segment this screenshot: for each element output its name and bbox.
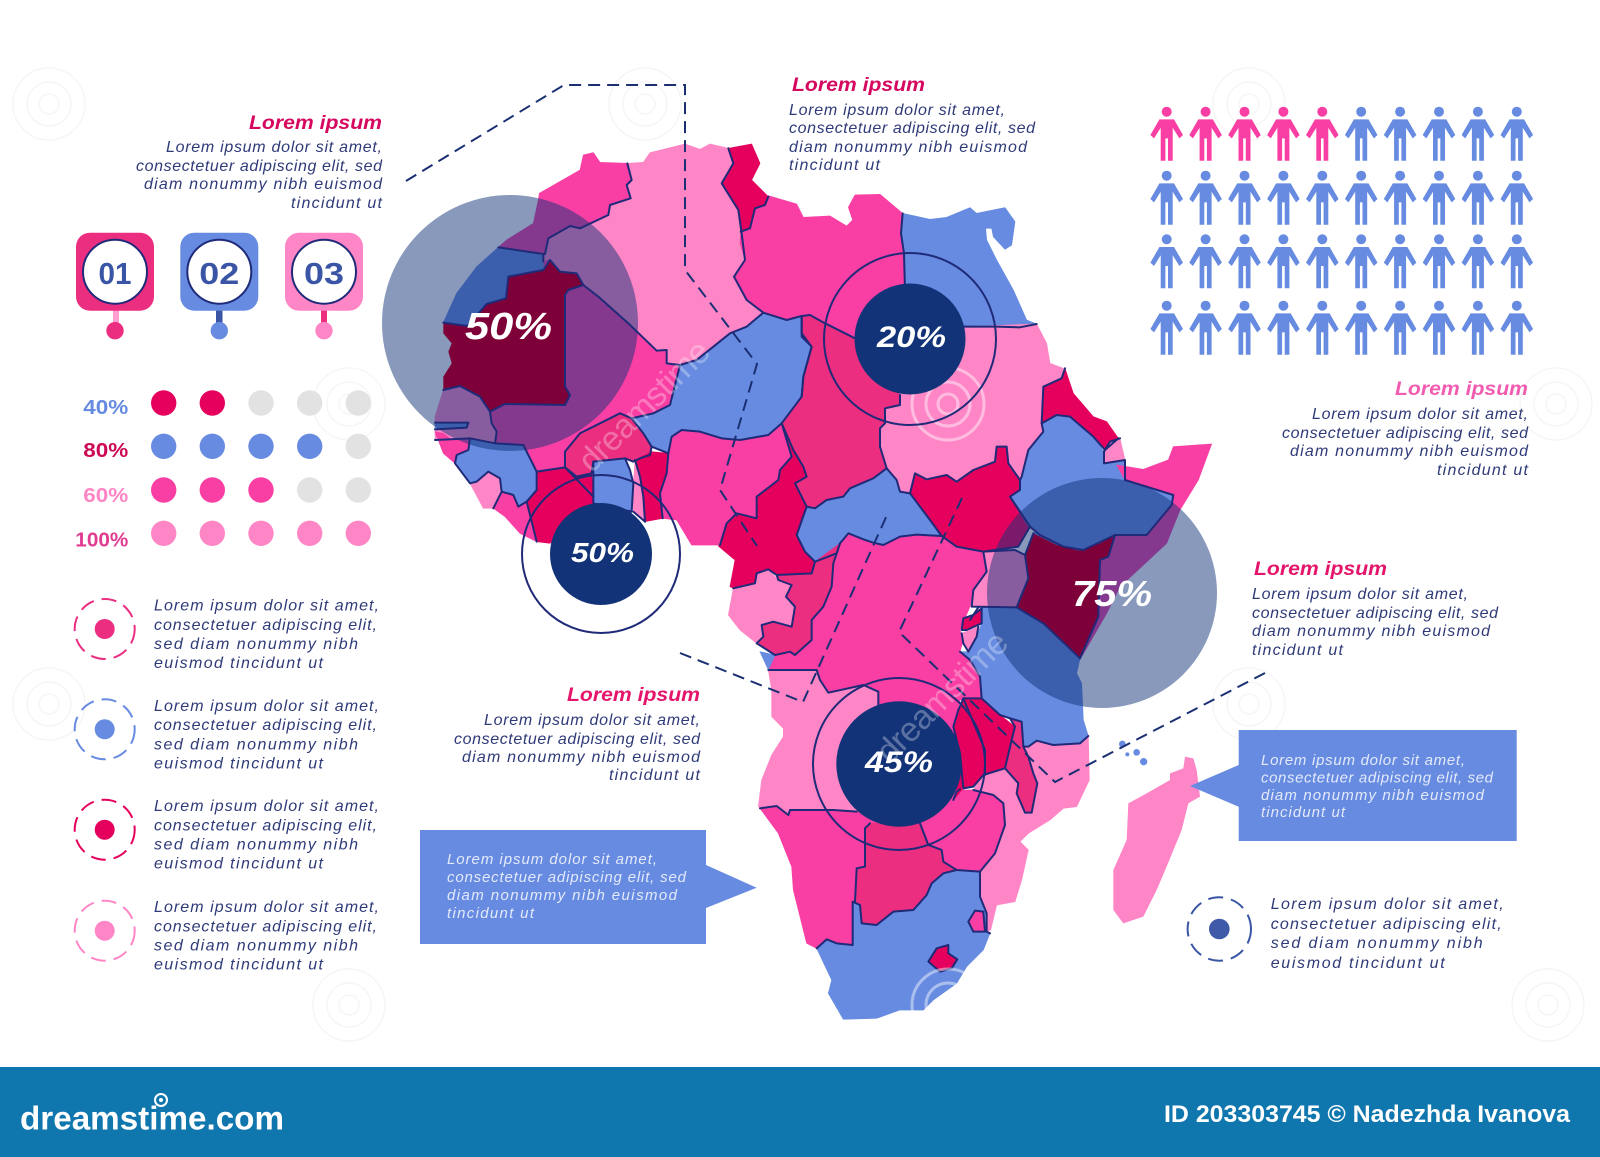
legend item: pink: Lorem ipsum dolor sit amet,: [154, 899, 379, 916]
text block: mid right: tincidunt ut: [1252, 642, 1344, 659]
badge 01: 01: [98, 256, 132, 291]
legend item: navy, bottom right: sed diam nonummy nibh: [1271, 935, 1483, 952]
text block: top left: tincidunt ut: [291, 195, 383, 212]
legend item: navy, bottom right: consectetuer adipiscing elit,: [1271, 916, 1502, 933]
legend item: blue: [75, 698, 379, 772]
text block: top centre: consectetuer adipiscing elit, sed: [789, 120, 1036, 137]
legend item: crimson: Lorem ipsum dolor sit amet,: [154, 798, 379, 815]
callout: right: [1190, 730, 1517, 841]
legend item: crimson: sed diam nonummy nibh: [154, 836, 358, 854]
legend item: navy, bottom right: Lorem ipsum dolor sit amet,: [1271, 896, 1504, 913]
stat ring: 20%: [824, 253, 996, 425]
legend item: navy, bottom right: euismod tincidunt ut: [1271, 955, 1445, 972]
text block: mid right: consectetuer adipiscing elit, sed: [1252, 605, 1499, 622]
text block: top left: Lorem ipsum dolor sit amet,: [166, 139, 382, 156]
dot rating: 40%: 40%: [83, 397, 129, 419]
callout: right: diam nonummy nibh euismod: [1261, 787, 1485, 804]
legend item: blue: Lorem ipsum dolor sit amet,: [154, 698, 379, 715]
legend item: pink: [75, 899, 379, 974]
legend item: pink: consectetuer adipiscing elit,: [154, 918, 377, 936]
watermark spirals on map: [912, 368, 984, 1041]
footer bar: [0, 1067, 1600, 1157]
map: Africa country fills, south: [728, 487, 1115, 1019]
callout: right: tincidunt ut: [1261, 804, 1346, 821]
dot rating: 60%: 60%: [83, 485, 129, 507]
stat ring: 20%: 20%: [876, 321, 946, 354]
text block: top left: [136, 113, 383, 212]
legend item: pink: sed diam nonummy nibh: [154, 938, 358, 954]
legend item: navy, bottom right: [1188, 896, 1504, 972]
text block: right: Lorem ipsum: [1395, 379, 1528, 400]
overlay circle: east 75%: [987, 478, 1217, 708]
map borders: west: [435, 148, 812, 545]
overlay circle: west 50%: [382, 195, 638, 451]
text block: right: Lorem ipsum dolor sit amet,: [1312, 406, 1528, 423]
text block: centre left: diam nonummy nibh euismod: [462, 749, 701, 766]
map: Africa country fills, west: [435, 144, 812, 560]
badge 02: 02: [199, 256, 239, 291]
watermark text: west: dreamstime: [571, 333, 718, 480]
text block: top centre: diam nonummy nibh euismod: [789, 139, 1028, 156]
text block: right: [1282, 379, 1529, 479]
dashed leader line: south-east region: [899, 498, 1265, 782]
callout: lower left: diam nonummy nibh euismod: [447, 887, 678, 904]
legend item: blue: consectetuer adipiscing elit,: [154, 717, 377, 734]
footer logo: dreamstime.com: [20, 1100, 284, 1136]
dot rating: 40%: [83, 390, 371, 419]
highlighted country: Kenya: [1017, 533, 1115, 658]
text block: right: consectetuer adipiscing elit, sed: [1282, 425, 1529, 442]
dot rating: 80%: 80%: [83, 440, 129, 462]
badge 03: [285, 233, 363, 339]
text block: mid right: Lorem ipsum: [1254, 559, 1387, 580]
callout: right: consectetuer adipiscing elit, sed: [1261, 770, 1494, 787]
legend item: pink: euismod tincidunt ut: [154, 956, 324, 974]
text block: centre left: Lorem ipsum: [567, 685, 700, 706]
stat ring: 45%: 45%: [864, 746, 933, 779]
callout: lower left: [420, 830, 757, 944]
legend item: blue: sed diam nonummy nibh: [154, 736, 358, 754]
map: Madagascar and Comoros: [1113, 741, 1200, 923]
text block: centre left: consectetuer adipiscing elit, sed: [454, 731, 701, 748]
legend item: rose: consectetuer adipiscing elit,: [154, 617, 377, 634]
pictogram: 40 people, 5 pink: [1150, 107, 1533, 355]
text block: top centre: tincidunt ut: [789, 157, 881, 174]
legend item: rose: Lorem ipsum dolor sit amet,: [154, 598, 379, 615]
callout: lower left: tincidunt ut: [447, 905, 535, 922]
stat ring: lower 50%: [522, 475, 680, 633]
callout: right: Lorem ipsum dolor sit amet,: [1261, 752, 1465, 769]
dashed leader line: central region: [680, 515, 887, 702]
watermark text: south: dreamstime: [869, 624, 1016, 771]
dot rating: 100%: 100%: [75, 530, 129, 552]
map borders: north-east: [782, 213, 1173, 562]
dot rating: 60%: [83, 477, 371, 507]
text block: top centre: Lorem ipsum dolor sit amet,: [789, 102, 1005, 119]
legend item: crimson: [75, 798, 379, 872]
callout: lower left: Lorem ipsum dolor sit amet,: [447, 851, 657, 868]
stat: west overlay 50%: 50%: [465, 306, 552, 348]
text block: top centre: Lorem ipsum: [792, 75, 925, 96]
badge 03: 03: [304, 256, 344, 291]
text block: mid right: diam nonummy nibh euismod: [1252, 623, 1491, 640]
stat ring: lower 50%: 50%: [571, 537, 634, 568]
dot rating: 80%: [83, 434, 371, 462]
text block: centre left: tincidunt ut: [609, 767, 701, 784]
text block: mid right: [1252, 559, 1499, 659]
stat: east overlay 75%: 75%: [1072, 573, 1152, 614]
text block: top left: diam nonummy nibh euismod: [144, 176, 383, 193]
text block: centre left: [454, 685, 701, 784]
text block: centre left: Lorem ipsum dolor sit amet,: [484, 712, 700, 729]
text block: right: diam nonummy nibh euismod: [1290, 443, 1529, 460]
text block: top left: Lorem ipsum: [249, 113, 382, 134]
legend item: rose: euismod tincidunt ut: [154, 655, 324, 672]
footer credit: ID 203303745 © Nadezhda Ivanova: [1164, 1101, 1571, 1128]
text block: top left: consectetuer adipiscing elit, sed: [136, 158, 383, 175]
stat ring: 45%: [813, 678, 985, 850]
text block: top centre: [789, 75, 1036, 174]
dot rating: 100%: [75, 521, 371, 552]
map borders: south: [733, 533, 1115, 972]
text block: mid right: Lorem ipsum dolor sit amet,: [1252, 586, 1468, 603]
badge 01: [76, 233, 154, 339]
legend item: rose: sed diam nonummy nibh: [154, 636, 358, 653]
dashed leader line: north-west region: [406, 85, 757, 546]
badge 02: [180, 233, 258, 339]
legend item: crimson: consectetuer adipiscing elit,: [154, 818, 377, 834]
legend item: blue: euismod tincidunt ut: [154, 756, 324, 772]
map: Africa country fills, north-east: [718, 194, 1212, 657]
text block: right: tincidunt ut: [1437, 462, 1529, 479]
legend item: rose: [75, 598, 379, 672]
legend item: crimson: euismod tincidunt ut: [154, 856, 324, 872]
highlighted country: Mauritania: [443, 260, 583, 412]
callout: lower left: consectetuer adipiscing elit, sed: [447, 869, 687, 886]
